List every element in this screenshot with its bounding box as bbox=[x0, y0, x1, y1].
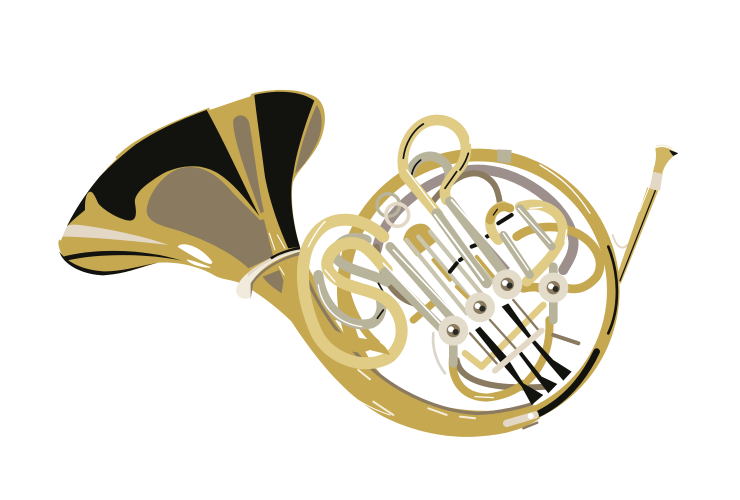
black levers bbox=[475, 327, 543, 405]
bell bbox=[58, 90, 340, 323]
mauve arc bbox=[377, 170, 574, 270]
central valve slides bbox=[403, 224, 438, 257]
right light loop bbox=[490, 205, 563, 282]
bell taupe reflection bbox=[147, 167, 273, 268]
taupe crook bbox=[377, 173, 547, 387]
rotary valve 3 bbox=[492, 269, 522, 299]
rotary valve 4 bbox=[538, 273, 568, 303]
water key bbox=[507, 413, 537, 428]
leadpipe and mouthpiece bbox=[613, 145, 677, 284]
gold lower slide bbox=[453, 320, 549, 398]
tubes from top loop bbox=[437, 213, 487, 283]
lever rods bbox=[470, 300, 538, 363]
black lower edge bbox=[59, 252, 158, 275]
valve rings bbox=[377, 194, 400, 216]
left sage loop bbox=[318, 238, 387, 324]
bell gold body bbox=[58, 90, 340, 323]
rotary valve 1 bbox=[438, 316, 468, 346]
cream streak bbox=[62, 225, 168, 245]
gold right loop bbox=[517, 227, 600, 289]
top light loop bbox=[403, 120, 466, 215]
main circular tube bbox=[343, 149, 617, 425]
crook and lower tube bbox=[280, 260, 540, 437]
bell ring collar bbox=[236, 247, 300, 299]
big left light loop bbox=[303, 220, 402, 363]
inner tubing bbox=[303, 120, 600, 398]
white highlights bbox=[58, 94, 294, 282]
valves and levers bbox=[438, 269, 572, 428]
taupe rim bbox=[295, 105, 322, 173]
bell black panel left bbox=[60, 110, 259, 240]
bell black panel right bbox=[254, 92, 314, 248]
rotary valve 2 bbox=[465, 292, 495, 322]
tubes to first valve bbox=[385, 247, 457, 333]
taupe below ring bbox=[263, 270, 291, 298]
black reflection line bbox=[63, 251, 182, 261]
sage upper loop bbox=[410, 156, 449, 183]
lever cross bar bbox=[495, 331, 542, 371]
tube stubs below valves bbox=[453, 267, 553, 363]
gold left curves bbox=[344, 250, 437, 343]
taupe teardrop bbox=[233, 115, 264, 213]
brace rod bbox=[553, 335, 578, 343]
